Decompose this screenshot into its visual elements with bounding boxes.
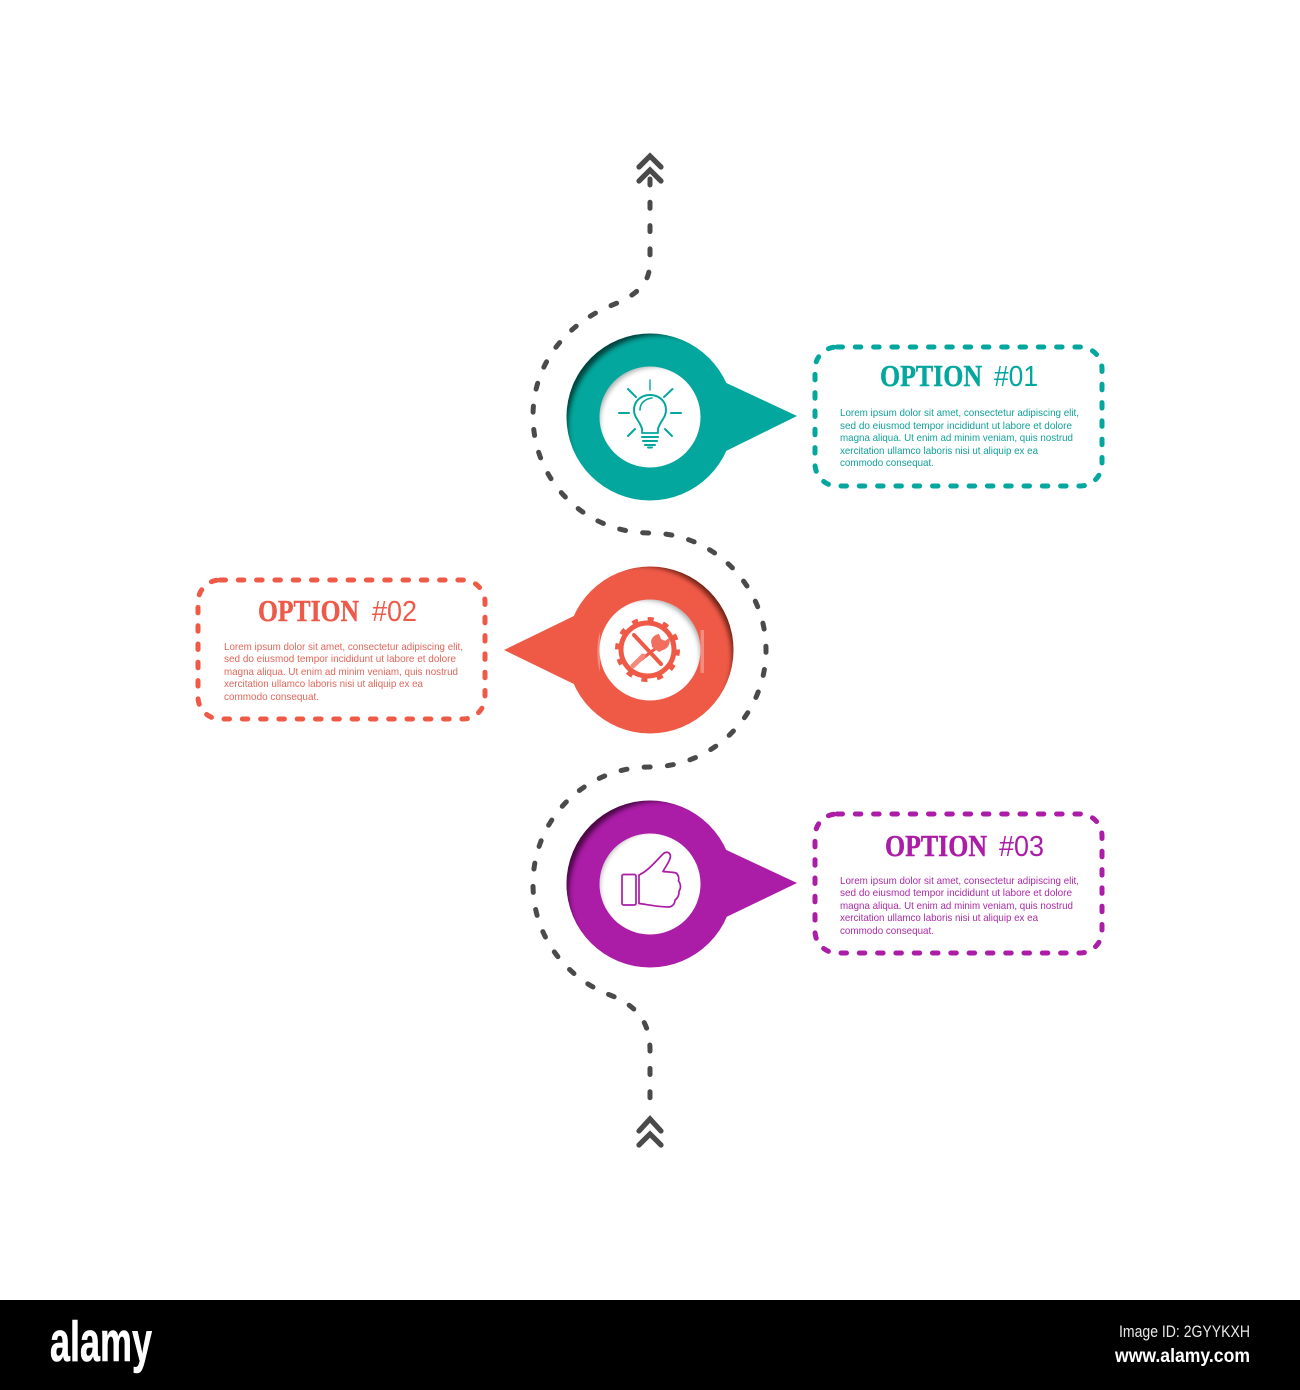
heading: option 01: #01 [994,361,1038,393]
body text: option 02: Lorem ipsum dolor sit amet, consectetur adipiscing elit, [224,641,463,653]
icon: gear with tools [618,620,678,680]
ring: purple [566,800,734,968]
heading: option 03: #03 [999,831,1044,863]
pointer: teal [720,380,797,454]
body text: option 02: sed do eiusmod tempor incididunt ut labore et dolore [224,653,456,665]
body text: option 01: magna aliqua. Ut enim ad minim veniam, quis nostrud [840,432,1073,444]
arrow: top chevrons [639,156,661,181]
footer band [0,1300,1300,1390]
pointer: purple [720,847,797,920]
heading: option 02: OPTION [258,593,359,628]
body text: option 03: commodo consequat. [840,925,934,937]
body text: option 03: sed do eiusmod tempor incididunt ut labore et dolore [840,887,1072,899]
body text: option 02: commodo consequat. [224,691,319,703]
body text: option 02: magna aliqua. Ut enim ad minim veniam, quis nostrud [224,666,458,678]
dashed winding path [533,179,766,1112]
callout box: option 02 [198,580,485,719]
hole: white [600,834,700,934]
website: www.alamy.com [1114,1346,1250,1367]
body text: option 03: xercitation ullamco laboris nisi ut aliquip ex ea [840,912,1038,924]
watermark fragment [597,630,704,673]
image id: Image ID: 2GYYKXH [1119,1322,1250,1341]
icon: light bulb [619,380,681,448]
arrow: bottom chevrons [639,1119,661,1145]
pin 1: teal [566,334,797,500]
body text: option 01: xercitation ullamco laboris nisi ut aliquip ex ea [840,445,1038,457]
logo: alamy: alamy [50,1310,152,1374]
heading: option 03: OPTION [885,828,987,863]
pointer: coral [504,613,580,687]
hole: white [600,366,700,468]
icon: thumbs up [622,852,680,907]
body text: option 01: Lorem ipsum dolor sit amet, consectetur adipiscing elit, [840,407,1079,419]
body text: option 03: magna aliqua. Ut enim ad minim veniam, quis nostrud [840,900,1073,912]
callout box: option 03 [815,814,1102,953]
hole: white [600,600,700,700]
callout box: option 01 [815,347,1102,486]
body text: option 01: commodo consequat. [840,457,934,469]
pin 2: coral [504,566,734,734]
body text: option 02: xercitation ullamco laboris nisi ut aliquip ex ea [224,678,423,690]
ring: teal [566,334,734,500]
heading: option 01: OPTION [880,358,982,393]
pin 3: purple [566,800,797,968]
body text: option 03: Lorem ipsum dolor sit amet, consectetur adipiscing elit, [840,875,1079,887]
heading: option 02: #02 [372,596,417,628]
body text: option 01: sed do eiusmod tempor incididunt ut labore et dolore [840,420,1072,432]
ring: coral [566,566,734,734]
